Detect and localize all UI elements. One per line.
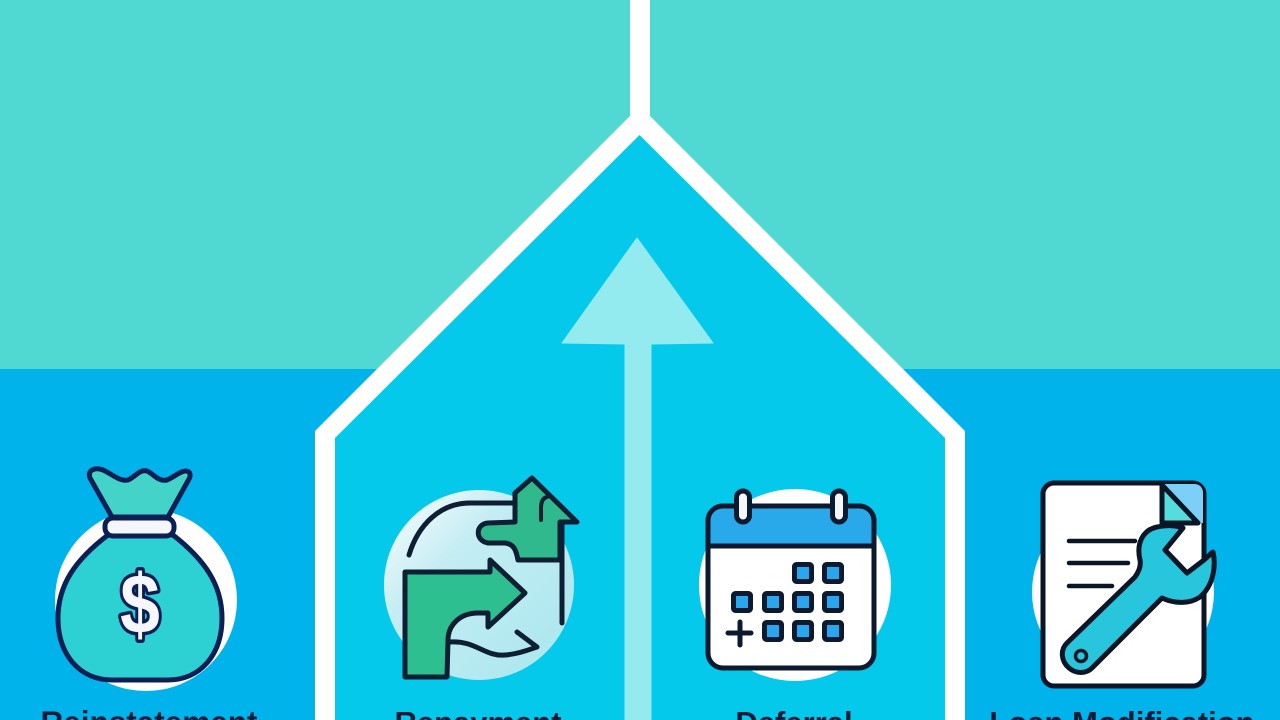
- icon: money bag: $: [120, 556, 160, 651]
- option: Reinstatement: [40, 469, 258, 720]
- icon: money bag: [55, 469, 237, 691]
- option: Repayment: [384, 478, 577, 720]
- icon: document and wrench: [1032, 483, 1214, 686]
- option: Deferral: [699, 489, 891, 720]
- icon: calendar: [699, 489, 891, 681]
- top background band: [0, 0, 1280, 369]
- icon: diverging arrows: [384, 478, 577, 680]
- option: Loan Modification: [989, 483, 1255, 720]
- bottom background band: [0, 369, 1280, 720]
- upward arrow: [562, 238, 713, 720]
- house outline with central panel: [315, 0, 965, 720]
